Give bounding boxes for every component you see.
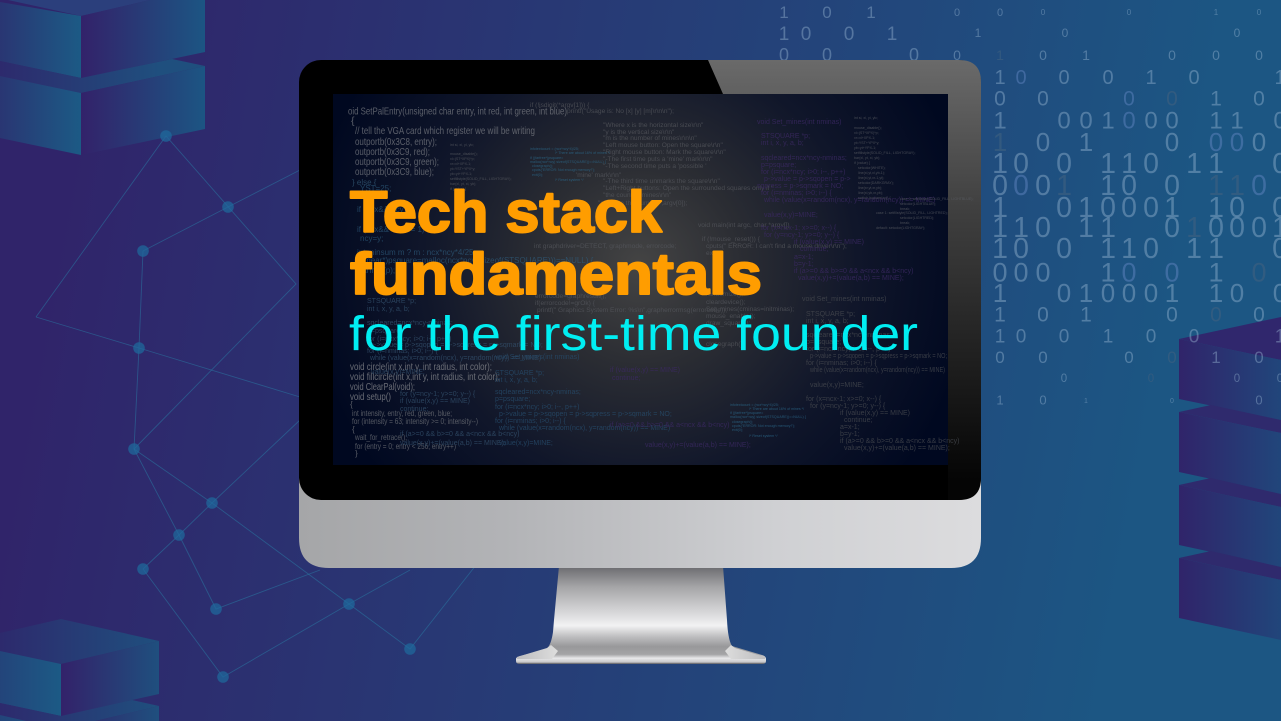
code block: set mines purple: value(x,y)+=(value(a,b) == MINE); xyxy=(645,442,751,449)
tiny code snippets: closegraph(); xyxy=(732,420,753,424)
code block: set mines purple: for (i=ncx*ncy; i>0; i--, p++) xyxy=(761,169,845,176)
tiny code snippets: malloc(ncx*ncy) sizeof(STSQUARE))==NULL) { xyxy=(530,160,607,164)
tiny code snippets: bar(xl, yt, xi, yb); xyxy=(450,182,476,186)
network diagram xyxy=(36,130,480,683)
tiny code snippets: mouse_disable(); xyxy=(854,126,882,130)
code block: set mines purple: if (a>=0 && b>=0 && a<ncx && b<ncy) xyxy=(610,422,729,429)
code block: set mines purple: if (value(x,y) == MINE) xyxy=(794,239,864,246)
binary digit rain xyxy=(779,3,1281,408)
code block: set mines purple: void Set_mines(int nminas) xyxy=(757,119,841,126)
code block: set mines left: int i, x, y, a, b; xyxy=(367,306,410,313)
tiny code snippets xyxy=(450,116,974,438)
code block: usage message: 'mine' mark\r\n" xyxy=(576,172,622,179)
code block: drawing prototypes: void circle(int x,int y, int radius, int color); xyxy=(350,361,492,373)
binary digit rain: 0 xyxy=(1123,88,1135,110)
code block: usage message: "Where x is the horizontal size\r\n" xyxy=(603,122,704,129)
bezel gloss xyxy=(708,60,981,500)
code block: usage message: "Left mouse button: Open the square\r\n" xyxy=(603,142,723,149)
tiny code snippets: setcolor(LIGHTRED); xyxy=(900,216,934,220)
code block: palette routine: outportb(0x3C9, green); xyxy=(355,156,439,168)
code block: usage message: "-The first time puts a 'mine' mark\r\n" xyxy=(603,156,713,163)
code block: usage message: cleardevice(); xyxy=(706,299,746,306)
binary digit rain: 000 xyxy=(779,45,919,65)
tiny code snippets: case 1: setfillstyle(SOLID_FILL, LIGHTRED); xyxy=(876,211,948,215)
code block: set mines left: STSQUARE *p; xyxy=(367,298,416,305)
binary digit rain: 100110110 xyxy=(992,233,1281,265)
code block: set mines centre blue: void Set_mines(int nminas) xyxy=(495,354,579,361)
code block: set mines purple xyxy=(610,119,935,449)
code block: set mines left: continue; xyxy=(400,406,428,413)
binary digit rain: 100110110 xyxy=(992,148,1281,180)
code block: set mines right grey: if (a>=0 && b>=0 && a<ncx && b<ncy) xyxy=(840,438,959,445)
code block: drawing prototypes: int intensity, entry, red, green, blue; xyxy=(352,408,452,418)
tiny code snippets: setfillstyle(SOLID_FILL, LIGHTGRAY); xyxy=(450,177,511,181)
code block: drawing prototypes xyxy=(350,361,500,458)
code block: set mines right grey: void Set_mines(int nminas) xyxy=(802,296,886,303)
tiny code snippets: switch (square(xy)) { xyxy=(858,196,891,200)
tiny code snippets: /* Reset system */ xyxy=(749,434,778,438)
code block: palette routine: int minsum m ? m : ncx*ncy*4/25; xyxy=(357,248,476,257)
code block: set mines centre blue: while (value(x=random(ncx), y=random(ncy)) == MINE) xyxy=(498,425,670,432)
tiny code snippets: setfillstyle(SOLID_FILL, LIGHTGRAY); xyxy=(854,151,915,155)
code block: palette routine: oid SetPalEntry(unsigned char entry, int red, int green, int blue) xyxy=(348,106,567,118)
binary digit rain: 00010 xyxy=(995,348,1264,367)
binary digit rain: 00 xyxy=(954,7,1003,19)
tiny code snippets: setcolor(DARKGRAY); xyxy=(858,181,894,185)
code block: set mines right grey: for (i=ncx*ncy; i>0; i--, p++) xyxy=(806,346,890,353)
tiny code snippets: if (value) { xyxy=(450,187,467,191)
code block: set mines left: if (a>=0 && b>=0 && a<ncx && b<ncy) xyxy=(400,431,519,438)
binary digit rain: 0010 xyxy=(994,88,1265,110)
code block: set mines purple: continue; xyxy=(612,375,640,382)
code block: set mines purple: a=x-1; xyxy=(794,254,814,261)
code block: set mines left: value(x,y)=MINE; xyxy=(371,369,425,376)
code block: set mines right grey: while (value(x=random(ncx), y=random(ncy)) == MINE) xyxy=(809,367,945,374)
code block: set mines purple: p=psquare; xyxy=(761,162,796,169)
binary digit rain: 1010001100 xyxy=(992,192,1281,224)
code block: set mines centre blue: int i, x, y, a, b; xyxy=(495,377,538,384)
code block: set mines purple: value(x,y)+=(value(a,b) == MINE); xyxy=(798,275,904,282)
code block: drawing prototypes: for (intensity = 63; intensity >= 0; intensity--) xyxy=(352,416,478,426)
code block: usage message: if(errorcode!=grOk) { xyxy=(535,300,596,307)
tiny code snippets: break; xyxy=(900,207,910,211)
code block: set mines left: if (value(x,y) == MINE) xyxy=(400,398,470,405)
tiny code snippets: cputs("ERROR: Not enough memory!"); xyxy=(532,168,595,172)
code block: set mines right grey: a=x-1; xyxy=(840,424,860,431)
code block: set mines right grey: int i, x, y, a, b; xyxy=(806,318,849,325)
binary digit rain: 0100 xyxy=(1036,127,1266,157)
code block: set mines right grey: if (value(x,y) == MINE) xyxy=(840,410,910,417)
binary digit rain: 100101 xyxy=(994,67,1281,89)
tiny code snippets: /* There are about 16% of mines */ xyxy=(555,151,610,155)
code block: palette routine: outportb(0x3C9, red); xyxy=(355,146,430,158)
tiny code snippets: line(xr,yt,xr,yb); xyxy=(858,186,882,190)
code block: set mines left: for (i=nminas; i>0; i--) { xyxy=(367,348,438,355)
code block: usage message: draw_square(); xyxy=(706,320,751,327)
code block: drawing prototypes: } xyxy=(355,448,358,458)
code block: set mines centre blue: for (i=nminas; i>0; i--) { xyxy=(495,418,566,425)
binary digit rain: 100100110 xyxy=(993,108,1281,134)
code block: set mines left: sqcleared=ncx*ncy-nminas; xyxy=(367,320,453,327)
tiny code snippets: break; xyxy=(900,221,910,225)
tiny code snippets: xl=(ST*XPX)*p; xyxy=(450,157,475,161)
code block: set mines right grey xyxy=(802,296,959,452)
code block: usage message: closegraph(); xyxy=(706,341,745,348)
code block: usage message: mouse_enable(); xyxy=(706,313,756,320)
binary digit rain: 00100 xyxy=(992,170,1180,202)
tiny code snippets: setcolor(LIGHTBLUE); xyxy=(900,202,936,206)
binary digit rain: 0 xyxy=(1148,373,1154,385)
code block: set mines centre blue xyxy=(495,354,672,447)
title: fundamentals xyxy=(350,242,762,307)
binary digit rain: 000 xyxy=(1061,373,1281,385)
code block: palette routine: { xyxy=(351,115,355,127)
code block: usage message: errorcode=graphresult(); xyxy=(535,293,606,300)
code block: set mines right grey: p->value = p->sqopen = p->sqpress = p->sqmark = NO; xyxy=(810,353,947,360)
monitor screen xyxy=(333,94,948,465)
tiny code snippets: if ((farfree*)psquare= xyxy=(730,411,763,415)
code block: set mines left: for (y=ncy-1; y>=0; y--) { xyxy=(400,391,476,398)
code block: drawing prototypes: void setup() xyxy=(350,391,391,403)
code block: usage message: "Left+Right buttons: Open the surrounded squares only if " xyxy=(603,185,774,192)
binary digit rain: 1 xyxy=(996,47,1004,63)
code block: set mines right grey: p=psquare; xyxy=(806,339,841,346)
code block: set mines right grey: for (y=ncy-1; y>=0; y--) { xyxy=(810,403,886,410)
code block: usage message: exit(); xyxy=(706,250,723,257)
code block: palette routine: farfree(p); xyxy=(360,266,395,275)
binary digit rain: 1001 xyxy=(779,24,897,45)
code block: set mines centre blue: p->value = p->sqopen = p->sqpress = p->sqmark = NO; xyxy=(499,411,672,418)
tiny code snippets: yt=YST+YPX*y; xyxy=(450,167,475,171)
code block: set mines centre blue: p=psquare; xyxy=(495,396,530,403)
binary digit rain: 0 xyxy=(1210,304,1222,326)
tiny code snippets: xr=xl+XPX-1; xyxy=(450,162,471,166)
code block: drawing prototypes: void ClearPal(void); xyxy=(350,381,415,393)
code block: usage message: void main(int argc, char *argv[]) xyxy=(698,222,790,229)
cubes: right stack xyxy=(1179,317,1281,640)
tiny code snippets: bar(xl, yt, xi, yb); xyxy=(854,156,880,160)
cubes: bottom left stack xyxy=(0,619,159,721)
code block: set mines left: value(x,y)+=(value(a,b) == MINE); xyxy=(400,440,506,447)
binary digit rain: 100 xyxy=(996,392,1263,408)
code block: drawing prototypes: { xyxy=(350,399,353,409)
code block: set mines right grey: value(x,y)=MINE; xyxy=(810,382,864,389)
binary digit rain: 0 xyxy=(1251,258,1267,288)
code block: set mines purple: for (y=ncy-1; y>=0; y--) { xyxy=(764,232,840,239)
binary digit rain: 00 xyxy=(1121,258,1180,288)
subtitle: for the first-time founder xyxy=(349,308,918,361)
tiny code snippets: yb=yt+YPX-1; xyxy=(450,172,472,176)
code block: palette routine: // tell the VGA card which register we will be writing xyxy=(355,125,535,137)
code block: set mines centre blue: for (i=ncx*ncy; i>0; i--, p++) xyxy=(495,404,579,411)
code block: set mines purple: int i, x, y, a, b; xyxy=(761,140,804,147)
tiny code snippets: /* There are about 16% of mines */ xyxy=(749,407,804,411)
code block: set mines purple: sqcleared=ncx*ncy-nminas; xyxy=(761,155,847,162)
tiny code snippets: if (value) { xyxy=(854,161,871,165)
tiny code snippets: yt=YST+YPX*y; xyxy=(854,141,879,145)
tiny code snippets: case 0: setfillstyle(SOLID_FILL, LIGHTBLUE); xyxy=(900,197,974,201)
tiny code snippets: malloc(ncx*ncy) sizeof(STSQUARE))==NULL) { xyxy=(730,415,807,419)
code block: usage message xyxy=(530,102,847,348)
binary digit rain: 1 xyxy=(993,127,1007,157)
tiny code snippets: default: setcolor(LIGHTGRAY); xyxy=(876,226,925,230)
code block: set mines right grey: value(x,y)+=(value(a,b) == MINE); xyxy=(844,445,950,452)
tiny code snippets: closegraph(); xyxy=(532,164,553,168)
binary digit rain: 0 xyxy=(1015,67,1027,89)
tiny code snippets: exit(0); xyxy=(732,428,743,432)
binary digit rain: 00 xyxy=(1013,170,1267,202)
code block: set mines left: for (i=ncx*ncy; i>0; i--, p++) xyxy=(367,336,451,343)
title: Tech stack xyxy=(350,180,663,245)
code block: set mines purple: b=y-1; xyxy=(794,261,814,268)
monitor stand xyxy=(516,566,766,664)
binary digit rain: 0 xyxy=(1122,108,1136,134)
tiny code snippets: /* Reset system */ xyxy=(555,178,584,182)
binary digit rain: 111 xyxy=(1056,170,1245,202)
code block: set mines right grey: sqcleared=ncx*ncy-nminas; xyxy=(806,332,892,339)
code block: usage message: "-The second time puts a 'possible ' xyxy=(603,163,706,170)
monitor black bezel xyxy=(299,60,981,500)
code block: palette routine: ncy=y; xyxy=(360,234,383,243)
code block: set mines purple: if (value(x,y) == MINE) xyxy=(610,367,680,374)
binary digit rain: 10100 xyxy=(994,304,1265,326)
cubes: top left stack xyxy=(0,0,205,155)
binary digit rain: 1101100001 xyxy=(992,212,1281,244)
code block: palette routine: outportb(0x3C8, entry); xyxy=(355,136,437,148)
tiny code snippets: line(xl,yb,xr,yb); xyxy=(858,191,883,195)
code block: set mines purple: if (a>=0 && b>=0 && a<ncx && b<ncy) xyxy=(794,268,913,275)
binary digit rain: 0010 xyxy=(1041,8,1262,17)
code block: set mines centre blue: sqcleared=ncx*ncy-nminas; xyxy=(495,389,581,396)
code block: usage message: if (!mouse_reset()) { xyxy=(702,236,761,243)
tiny code snippets: yb=yt+YPX-1; xyxy=(854,146,876,150)
code block: set mines left: p=psquare; xyxy=(367,328,402,335)
monitor silver chin xyxy=(299,470,981,568)
code block: usage message: "m is the number of mines\r\n\n" xyxy=(603,135,697,142)
code block: usage message: cputs(" ERROR: I can't find a mouse driver\r\n"); xyxy=(706,243,847,250)
tiny code snippets: setcolor(WHITE); xyxy=(858,166,886,170)
tiny code snippets: line(xl,yt,xl,yb-1); xyxy=(858,171,885,175)
tiny code snippets: mouse_disable(); xyxy=(450,152,478,156)
code block: palette routine: YST=25; xyxy=(360,184,391,193)
code block: usage message: "Right mouse button: Mark the square\r\n" xyxy=(603,149,726,156)
code block: usage message: printf("Usage is: No [x] [y] [m]\r\n\n"); xyxy=(567,108,674,115)
code block: drawing prototypes: for (entry = 0; entry < 256; entry++) xyxy=(355,441,456,451)
tiny code snippets: if ((farfree*)psquare= xyxy=(530,156,563,160)
tiny code snippets: xl=(ST*XPX)*p; xyxy=(854,131,879,135)
code block: usage message: "-The third time unmarks the square\r\n" xyxy=(603,178,720,185)
binary digit rain: 0 xyxy=(1166,88,1178,110)
code block: set mines left xyxy=(367,298,543,447)
tiny code snippets: int si, xi, yi, ylc; xyxy=(854,116,878,120)
code block: drawing prototypes: { xyxy=(352,424,355,434)
tiny code snippets: infotextcount = (ncx*ncy*4)/25; xyxy=(730,403,779,407)
code block: set mines purple: for (i=nminas; i>0; i--) { xyxy=(761,190,832,197)
binary digit rain: 00 xyxy=(1209,127,1244,157)
binary digit rain: 0 xyxy=(1167,348,1177,367)
code block: set mines left: p->value = p->sqopen = p->sqpress = p->sqmark = NO; xyxy=(370,342,543,349)
code block: usage message: int graphdriver=DETECT, graphmode, errorcode; xyxy=(534,243,677,250)
code block: palette routine: if (ncx&& ncy >= 1) xyxy=(357,225,425,234)
code block: set mines purple: while (value(x=random(ncx), y=random(ncy)) == MINE) xyxy=(763,197,935,204)
code block: usage message: printf(" Graphics System Error: %s\n",grapherrormsg(errorcode)); xyxy=(537,307,727,314)
title xyxy=(350,180,762,307)
binary digit rain: 1010001100 xyxy=(993,278,1281,308)
code block: palette routine: if (ncx&& ncy) xyxy=(357,205,407,214)
code block: set mines centre blue: STSQUARE *p; xyxy=(495,370,544,377)
code block: usage message: if (!isdigit(*argv[1])) { xyxy=(530,102,590,109)
tiny code snippets: cputs("ERROR: Not enough memory!"); xyxy=(732,424,795,428)
binary digit rain: 00011 xyxy=(992,258,1224,288)
code block: set mines right grey: STSQUARE *p; xyxy=(806,311,855,318)
code block: palette routine xyxy=(348,106,594,275)
code block: drawing prototypes: wait_for_retrace(); xyxy=(354,432,407,442)
code block: palette routine: if((near*)psquare=malloc(ncx*ncy) sizeof(STSQUARE)))==NULL) { xyxy=(357,256,594,265)
tiny code snippets: line(xl,yt,xr-1,yt); xyxy=(858,176,884,180)
binary digit rain: 100 xyxy=(975,26,1241,40)
code block: set mines right grey: b=y-1; xyxy=(840,431,860,438)
code block: usage message: "the count of mines\r\n" xyxy=(603,192,672,199)
code block: set mines purple: continue; xyxy=(800,246,828,253)
code block: set mines right grey: continue; xyxy=(844,417,872,424)
screen code text xyxy=(348,102,974,458)
tiny code snippets: int si, xi, yi, ylc; xyxy=(450,143,474,147)
tiny code snippets: infotextcount = (ncx*ncy*4)/25; xyxy=(530,147,579,151)
code block: set mines purple: value(x,y)=MINE; xyxy=(764,212,818,219)
code block: set mines centre blue: value(x,y)=MINE; xyxy=(499,440,553,447)
code block: usage message: randomize(); xyxy=(706,291,743,298)
binary digit rain: 1 xyxy=(1186,212,1202,244)
code block: set mines left: while (value(x=random(ncx), y=random(ncy)) == MINE) xyxy=(369,355,541,362)
code block: set mines right grey: for (i=nminas; i>0; i--) { xyxy=(806,360,877,367)
code block: set mines right grey: for (x=ncx-1; x>=0; x--) { xyxy=(806,396,882,403)
code block: set mines purple: for (x=ncx-1; x>=0; x--) { xyxy=(761,225,837,232)
code block: palette routine: } else { xyxy=(352,178,377,187)
binary digit rain: 10 xyxy=(1084,398,1174,405)
code block: set mines purple: sqpress = p->sqmark = NO; xyxy=(757,183,843,190)
tiny code snippets: xr=xl+XPX-1; xyxy=(854,136,875,140)
code block: usage message: Set_mines(cminas=initminas); xyxy=(706,306,794,313)
tiny code snippets: exit(0); xyxy=(532,173,543,177)
code block: set mines purple: STSQUARE *p; xyxy=(761,133,810,140)
binary digit rain: 001000 xyxy=(953,47,1263,63)
code block: drawing prototypes: void fillcircle(int x,int y, int radius, int color); xyxy=(350,371,500,383)
code block: usage message: "y is the vertical size\r\n" xyxy=(603,129,675,136)
code block: set mines purple: p->value = p->sqopen = p-> xyxy=(764,176,851,183)
binary digit rain: 1001001 xyxy=(995,326,1281,348)
code block: usage message: "equal to the number",argv[0]); xyxy=(598,200,688,207)
code block: palette routine: outportb(0x3C9, blue); xyxy=(355,166,434,178)
binary digit rain: 101 xyxy=(779,3,876,22)
